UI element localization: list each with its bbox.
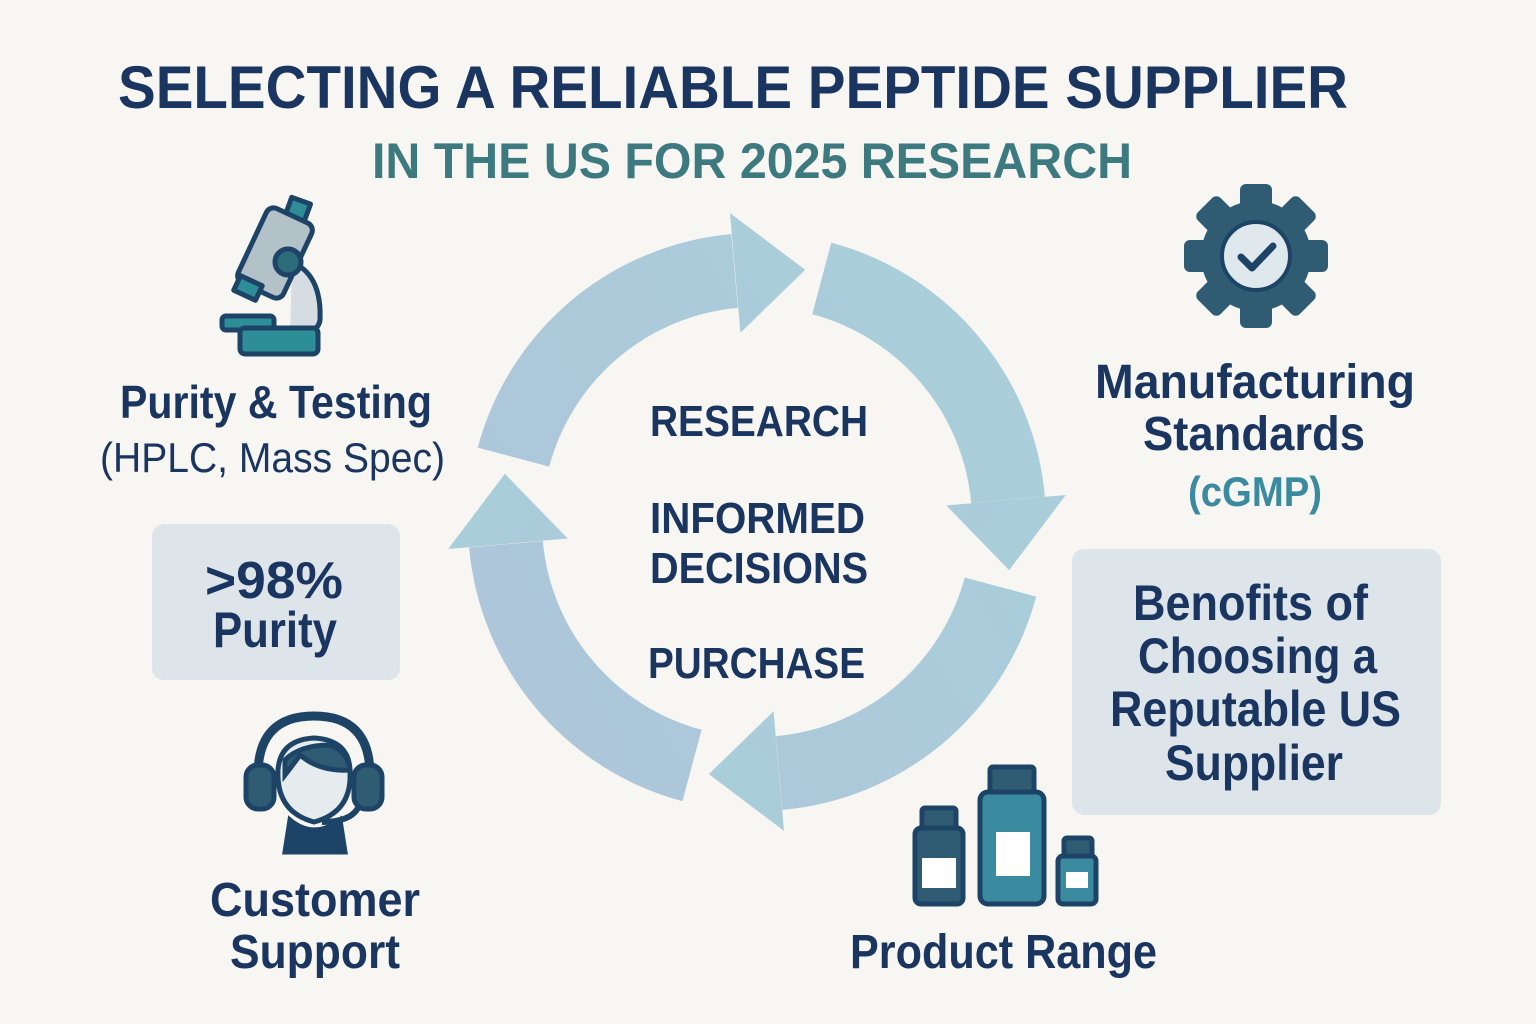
- callout: benefits: Benofits of: [1133, 575, 1368, 631]
- center text: research: RESEARCH: [650, 397, 868, 446]
- heading: purity & testing: Purity & Testing: [120, 376, 432, 428]
- center text: informed decisions: INFORMED: [650, 494, 865, 543]
- subtitle: IN THE US FOR 2025 RESEARCH: [372, 133, 1132, 189]
- heading: customer support: Customer: [210, 874, 420, 927]
- icon: bottles: [915, 767, 1096, 904]
- center text: purchase: PURCHASE: [648, 639, 865, 688]
- icon: microscope: [222, 197, 320, 354]
- callout: benefits: Choosing a: [1138, 628, 1378, 684]
- callout: 98% purity: >98%: [205, 552, 343, 610]
- icon: headset: [246, 716, 382, 852]
- callout: 98% purity: [152, 524, 400, 680]
- title: SELECTING A RELIABLE PEPTIDE SUPPLIER: [118, 54, 1348, 121]
- heading: customer support: Support: [230, 926, 400, 979]
- heading: product range: Product Range: [850, 926, 1157, 979]
- center text: informed decisions: [650, 494, 868, 593]
- text: cgmp: (cGMP): [1188, 468, 1322, 515]
- callout: benefits: [1072, 549, 1441, 815]
- callout: 98% purity: Purity: [213, 602, 337, 658]
- center text: informed decisions: DECISIONS: [650, 544, 868, 593]
- cycle arrows: [442, 207, 1072, 837]
- heading: manufacturing standards: [1095, 356, 1415, 461]
- heading: manufacturing standards: Manufacturing: [1095, 356, 1415, 409]
- callout: benefits: Supplier: [1165, 735, 1343, 791]
- text: hplc mass spec: (HPLC, Mass Spec): [100, 434, 445, 481]
- icon: gear: [1184, 184, 1328, 328]
- callout: benefits: Reputable US: [1110, 681, 1401, 737]
- heading: manufacturing standards: Standards: [1143, 408, 1365, 461]
- heading: customer support: [210, 874, 420, 979]
